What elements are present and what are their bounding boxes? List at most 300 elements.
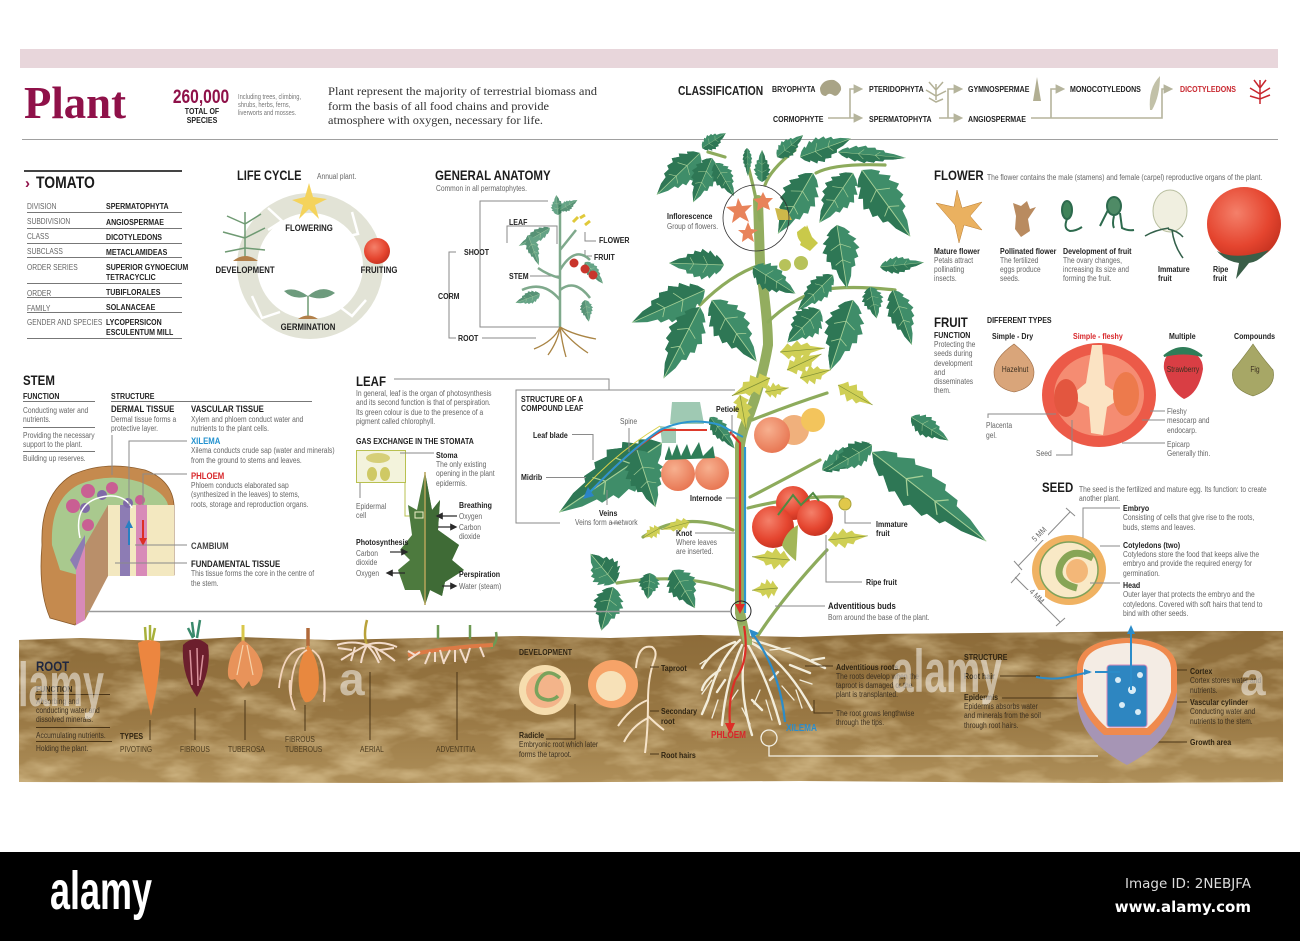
icon: seed germination stage 2 [588, 647, 664, 753]
panel: general anatomy: FRUIT [594, 252, 615, 262]
panel: compound leaf structure: Veins form a network [575, 517, 638, 527]
panel: fruit: Compounds [1234, 331, 1276, 341]
soil band [19, 631, 1283, 783]
anatomy plant [513, 195, 608, 357]
panel: life cycle: DEVELOPMENT [215, 264, 275, 275]
panel: root structure: Adventitious roots [836, 662, 899, 672]
species count: shrubs, herbs, ferns, [238, 102, 290, 109]
callout: immature fruit: Immature [876, 519, 908, 529]
panel: root development: Embryonic root which later [519, 739, 599, 749]
icon: moss [820, 80, 841, 96]
panel: root development: forms the taproot. [519, 749, 572, 759]
panel: fruit: seeds during [934, 348, 972, 358]
panel: leaf: Photosynthesis [356, 537, 409, 547]
panel: life cycle: FRUITING [361, 264, 398, 275]
plant roots [700, 625, 825, 740]
panel: stem: STEM [23, 372, 55, 388]
circle: adventitious buds [731, 601, 751, 621]
panel: seed: another plant. [1079, 493, 1120, 503]
panel: stem: CAMBIUM [191, 540, 229, 551]
callout: knot: are inserted. [676, 546, 713, 556]
illustration: tomato plant [545, 126, 1000, 640]
panel: root structure: Conducting water and [1190, 706, 1255, 716]
panel: root: dissolved minerals. [36, 714, 93, 724]
intro text: Plant represent the majority of terrestrial biomass and [328, 84, 597, 98]
panel: root structure: nutrients to the stem. [1190, 716, 1253, 726]
callout: immature fruit: fruit [876, 528, 890, 538]
panel: compound leaf structure: Leaf blade [533, 430, 568, 440]
panel: flower: Development of fruit [1063, 246, 1132, 256]
callout: knot: Knot [676, 528, 692, 538]
icon: developing fruit [1062, 197, 1134, 231]
leaves [578, 126, 1000, 634]
panel: root development [519, 647, 698, 760]
panel: root structure: Root hair [964, 671, 995, 681]
species count [173, 86, 301, 125]
panel: life cycle: LIFE CYCLE [237, 168, 301, 183]
panel: tomato taxonomy: ESCULENTUM MILL [106, 327, 174, 337]
classification: CLASSIFICATION [678, 85, 763, 98]
species count: SPECIES [187, 115, 217, 125]
panel: root development: Taproot [661, 663, 687, 673]
panel: tomato taxonomy: SPERMATOPHYTA [106, 201, 169, 211]
panel: fruit: Placenta [986, 420, 1013, 430]
panel: fruit: mesocarp and [1167, 415, 1210, 425]
panel: seed: The seed is the fertilized and mature egg. Its function: to create [1079, 484, 1267, 494]
panel: stem [23, 372, 335, 625]
icon: tomato section [1042, 343, 1156, 447]
panel: flower: FLOWER [934, 167, 984, 183]
panel: compound leaf structure: Midrib [521, 472, 542, 482]
panel: tomato taxonomy: SUBCLASS [27, 246, 63, 256]
panel: compound leaf structure [516, 390, 735, 527]
panel: tomato taxonomy: CLASS [27, 231, 49, 241]
panel: stem: (synthesized in the leaves) to stems, [191, 489, 300, 499]
panel: flower: Mature flower [934, 246, 980, 256]
panel: fruit: FUNCTION [934, 330, 971, 340]
panel: tomato taxonomy: TOMATO [36, 174, 95, 192]
icon: fig [1232, 344, 1274, 396]
panel: leaf: Its green colour is due to the presence of a [356, 407, 484, 417]
panel: root structure [761, 625, 1261, 765]
panel: fruit: Fig [1250, 364, 1260, 374]
panel: stem: PHLOEM [191, 470, 224, 481]
panel: leaf: dioxide [356, 557, 377, 567]
panel: leaf: cell [356, 510, 366, 520]
header band [20, 49, 1278, 68]
panel: root: AERIAL [360, 744, 384, 754]
icon: seed germination stage 1 [519, 665, 571, 715]
classification: PTERIDOPHYTA [869, 84, 924, 94]
classification arrows [828, 89, 1170, 118]
panel: root structure: STRUCTURE [964, 652, 1007, 662]
classification: DICOTYLEDONS [1180, 84, 1236, 94]
panel: flower: Pollinated flower [1000, 246, 1056, 256]
callout: adventitious buds: Born around the base of the plant. [828, 612, 929, 622]
panel: tomato taxonomy: FAMILY [27, 303, 50, 313]
panel: general anatomy: GENERAL ANATOMY [435, 167, 551, 183]
panel: fruit: Simple - Dry [992, 331, 1034, 341]
panel: leaf: opening in the plant [436, 468, 495, 478]
panel: leaf: Water (steam) [459, 581, 502, 591]
panel: life cycle: GERMINATION [281, 321, 335, 332]
plant roots: PHLOEM [711, 729, 746, 740]
icon: pollinated flower [1013, 201, 1036, 237]
species count: TOTAL OF [185, 106, 219, 116]
panel: root structure: nutrients. [1190, 685, 1218, 695]
panel: stem: FUNCTION [23, 391, 60, 401]
panel: flower: The ovary changes, [1063, 255, 1122, 265]
panel: flower: forming the fruit. [1063, 273, 1111, 283]
panel: root: PIVOTING [120, 744, 152, 754]
panel: seed: Consisting of cells that give rise to the roots, [1123, 512, 1254, 522]
panel: general anatomy: STEM [509, 271, 529, 281]
icon: mature flower [936, 190, 982, 243]
panel: tomato taxonomy: TETRACYCLIC [106, 272, 156, 282]
panel: fruit: Hazelnut [1002, 364, 1029, 374]
panel: tomato taxonomy: DIVISION [27, 201, 56, 211]
panel: general anatomy: FLOWER [599, 235, 630, 245]
panel: root structure: Epidermis absorbs water [964, 701, 1038, 711]
panel: leaf: Breathing [459, 500, 492, 510]
connector: stem to plant [87, 610, 731, 612]
stems [617, 150, 895, 640]
classification: MONOCOTYLEDONS [1070, 84, 1141, 94]
panel: root structure: Growth area [1190, 737, 1232, 747]
panel: stem: Xylem and phloem conduct water and [191, 414, 303, 424]
circle: inflorescence [723, 185, 789, 251]
classification [678, 76, 1270, 124]
panel: root structure: The root grows lengthwise [836, 708, 914, 718]
panel: seed [1011, 479, 1267, 626]
icon: seedling [284, 289, 335, 319]
callout: spine: Spine [620, 416, 637, 426]
panel: compound leaf structure: STRUCTURE OF A [521, 394, 583, 404]
panel: flower: increasing its size and [1063, 264, 1129, 274]
panel: root structure: through the tips. [836, 717, 884, 727]
panel: stem: support to the plant. [23, 439, 82, 449]
icon: young plant [223, 212, 265, 261]
watermarks: lamy [18, 651, 104, 720]
classification: SPERMATOPHYTA [869, 114, 932, 124]
panel: tomato taxonomy [24, 170, 189, 338]
panel: fruit: FRUIT [934, 314, 968, 330]
panel: tomato taxonomy: GENDER AND SPECIES [27, 317, 102, 327]
root hair and sap arrow [1036, 625, 1135, 690]
panel: flower: Petals attract [934, 255, 974, 265]
panel: root structure: taproot is damaged or the [836, 680, 912, 690]
panel: seed: SEED [1042, 479, 1073, 495]
bracket lines [449, 201, 596, 338]
root type leader lines [150, 672, 457, 740]
icon: strawberry [1164, 348, 1203, 399]
panel: stem: Conducting water and [23, 405, 88, 415]
panel: root structure: Cortex stores water and [1190, 675, 1261, 685]
panel: root: conducting water and [36, 705, 100, 715]
watermarks: a [339, 653, 365, 705]
callout: adventitious buds [775, 600, 929, 622]
panel: fruit: them. [934, 385, 951, 395]
panel: leaf: In general, leaf is the organ of photosynthesis [356, 388, 492, 398]
icon: hazelnut [994, 344, 1034, 392]
panel: stem: DERMAL TISSUE [111, 403, 175, 414]
panel: stem: XILEMA [191, 435, 221, 446]
species count: Including trees, climbing, [238, 94, 301, 101]
panel: flower: Ripe [1213, 264, 1229, 274]
panel: general anatomy: SHOOT [464, 247, 489, 257]
plant callouts [620, 211, 929, 622]
panel: leaf: Carbon [356, 548, 378, 558]
panel: leaf: Epidermal [356, 501, 387, 511]
callout: inflorescence: Inflorescence [667, 211, 713, 221]
panel: root: FIBROUS [285, 734, 315, 744]
panel: fruit: DIFFERENT TYPES [987, 315, 1052, 325]
callout: internode [690, 493, 737, 503]
callout: ripe fruit: Ripe fruit [866, 577, 897, 587]
panel: stem: Building up reserves. [23, 453, 86, 463]
panel: leaf: and its second function is that of perspiration. [356, 397, 491, 407]
panel: flower: Immature [1158, 264, 1190, 274]
panel: seed: germination. [1123, 568, 1160, 578]
inflorescence flowers [726, 192, 818, 271]
panel: leaf: epidermis. [436, 478, 467, 488]
tomatoes [661, 408, 851, 561]
panel: stem: nutrients to the plant cells. [191, 423, 269, 433]
panel: stem: This tissue forms the core in the centre of [191, 568, 315, 578]
panel: seed: Outer layer that protects the embryo and the [1123, 589, 1255, 599]
icon: ripe fruit [1207, 187, 1281, 279]
panel: tomato taxonomy: TUBIFLORALES [106, 287, 160, 297]
panel: tomato taxonomy: SUPERIOR GYNOECIUM [106, 262, 189, 272]
yellow leaves [639, 338, 878, 600]
panel: flower: pollinating [934, 264, 964, 274]
intro text: atmosphere with oxygen, necessary for life. [328, 113, 543, 127]
panel: stem: VASCULAR TISSUE [191, 403, 264, 414]
icon: adventitious root [408, 625, 496, 664]
footer bar [0, 852, 1300, 941]
callout: knot: Where leaves [676, 537, 717, 547]
panel: root: FIBROUS [180, 744, 210, 754]
panel: root development: Root hairs [661, 750, 696, 760]
panel: life cycle: FLOWERING [285, 222, 333, 233]
connector: root tip to section [769, 746, 1098, 756]
footer bar: alamy [50, 861, 152, 921]
panel: fruit: Multiple [1169, 331, 1196, 341]
panel: root: ADVENTITIA [436, 744, 476, 754]
stem cross-section [41, 466, 174, 625]
leaf illustration [398, 472, 464, 605]
panel: leaf: GAS EXCHANGE IN THE STOMATA [356, 436, 474, 446]
panel: seed: Head [1123, 580, 1140, 590]
panel: root structure: Epidermis [964, 692, 999, 702]
panel: stem: from the ground to stems and leaves. [191, 455, 302, 465]
callout: inflorescence: Group of flowers. [667, 221, 718, 231]
panel: general anatomy: LEAF [509, 217, 528, 227]
panel: fruit: Protecting the [934, 339, 975, 349]
panel: seed: Embryo [1123, 503, 1149, 513]
panel: seed: bind with other seeds. [1123, 608, 1188, 618]
panel: compound leaf structure: COMPOUND LEAF [521, 403, 583, 413]
classification: ANGIOSPERMAE [968, 114, 1026, 124]
title: Plant [24, 78, 126, 128]
panel: fruit: Seed [1036, 448, 1052, 458]
footer bar: www.alamy.com [1115, 898, 1251, 916]
panel: flower: seeds. [1000, 273, 1020, 283]
panel: general anatomy: ROOT [458, 333, 479, 343]
panel: stem: protective layer. [111, 423, 158, 433]
panel: root structure: through root hairs. [964, 720, 1018, 730]
panel: leaf: Oxygen [356, 568, 379, 578]
panel: root structure: and minerals from the soil [964, 710, 1041, 720]
panel: root: Holding the plant. [36, 743, 88, 753]
classification: GYMNOSPERMAE [968, 84, 1029, 94]
panel: seed: cotyledons. Covered with soft hairs that tend to [1123, 599, 1263, 609]
panel: stem: nutrients. [23, 414, 51, 424]
panel: leaf: Oxygen [459, 511, 482, 521]
species count: 260,000 [173, 86, 229, 107]
panel: leaf: LEAF [356, 373, 386, 389]
panel: leaf: Stoma [436, 450, 458, 460]
watermarks [18, 638, 1266, 720]
icon: fibrous tuberous root [279, 628, 325, 710]
panel: flower: fruit [1158, 273, 1172, 283]
panel: stem: Providing the necessary [23, 430, 95, 440]
stem callout lines [112, 435, 187, 563]
panel: root: Accumulating nutrients. [36, 730, 106, 740]
panel: root structure: Cortex [1190, 666, 1213, 676]
callout: ripe fruit [826, 535, 897, 587]
panel: tomato taxonomy: ORDER SERIES [27, 262, 78, 272]
callout: spine [620, 416, 637, 452]
panel: seed: Cotyledons store the food that keeps alive the [1123, 549, 1259, 559]
panel: leaf: Perspiration [459, 569, 500, 579]
panel: root development: Radicle [519, 730, 545, 740]
watermarks: alamy [892, 638, 1002, 705]
callout: petiole [716, 404, 740, 435]
callout: knot [676, 528, 735, 556]
panel: root structure: The roots develop when the [836, 671, 919, 681]
panel: stem: Dermal tissue forms a [111, 414, 177, 424]
panel: leaf: pigment called chlorophyll. [356, 416, 435, 426]
gas exchange arrows [388, 516, 457, 586]
panel: root structure: plant is transplanted. [836, 689, 898, 699]
panel: tomato taxonomy: METACLAMIDEAS [106, 247, 167, 257]
panel: general anatomy: CORM [438, 291, 460, 301]
panel: seed: Cotyledons (two) [1123, 540, 1181, 550]
seed dimensions [1011, 508, 1075, 626]
panel: leaf: dioxide [459, 531, 480, 541]
panel: leaf: Carbon [459, 522, 481, 532]
panel: general anatomy: Common in all permatophytes. [436, 183, 527, 193]
compound leaf [545, 402, 743, 533]
panel: tomato taxonomy: LYCOPERSICON [106, 317, 162, 327]
panel: fruit: and [934, 367, 945, 377]
callout: inflorescence [667, 211, 718, 231]
icon: flower [292, 183, 327, 219]
panel: flower: fruit [1213, 273, 1227, 283]
icon: grass blade [1150, 76, 1160, 110]
panel: stem: the stem. [191, 578, 219, 588]
icon: fern [926, 82, 946, 102]
icon: taproot [138, 625, 160, 716]
panel: fruit: Strawberry [1167, 364, 1199, 374]
panel: life cycle [215, 168, 398, 332]
seed dimensions: 4 MM [1027, 587, 1046, 606]
flow lines in stem [730, 432, 745, 614]
panel: fruit: Simple - fleshy [1073, 331, 1123, 341]
panel: leaf [356, 373, 609, 605]
panel: root: FUNCTION [36, 684, 73, 694]
circle: root tip [761, 730, 777, 746]
panel: fruit: endocarp. [1167, 425, 1197, 435]
panel: root: TYPES [120, 731, 143, 741]
intro text: form the basis of all food chains and provide [328, 99, 549, 113]
classification: BRYOPHYTA [772, 84, 816, 94]
panel: stem: roots, storage and reproduction organs. [191, 499, 309, 509]
panel: fruit: Fleshy [1167, 406, 1187, 416]
panel: flower: insects. [934, 273, 957, 283]
icon: fibrous root [183, 620, 209, 697]
panel: stem: Phloem conducts elaborated sap [191, 480, 289, 490]
panel: root development: root [661, 716, 675, 726]
callout: immature fruit [845, 511, 908, 538]
panel: fruit: development [934, 358, 973, 368]
footer bar: Image ID: 2NEBJFA [1125, 876, 1252, 892]
panel: root: TUBEROUS [285, 744, 322, 754]
panel: tomato taxonomy: SOLANACEAE [106, 302, 155, 312]
panel: root development: Secondary [661, 706, 698, 716]
panel: root: ROOT [36, 658, 69, 674]
species count: liverworts and mosses. [238, 110, 296, 117]
panel: flower: The fertilized [1000, 255, 1038, 265]
cycle ring [247, 203, 373, 329]
icon: dicot plant [1250, 80, 1270, 104]
root section [1077, 638, 1177, 765]
panel: seed: buds, stems and leaves. [1123, 522, 1195, 532]
panel: life cycle: Annual plant. [317, 171, 356, 181]
icon: immature fruit [1145, 190, 1187, 258]
fruit section callouts [988, 411, 1165, 455]
panel: leaf: The only existing [436, 459, 486, 469]
panel: stem: STRUCTURE [111, 391, 154, 401]
panel: tomato taxonomy: › [25, 175, 30, 192]
panel: root development: DEVELOPMENT [519, 647, 572, 657]
icon: seed section [1032, 535, 1106, 605]
panel: flower: The flower contains the male (stamens) and female (carpel) reproductive organs of the plant. [987, 172, 1262, 182]
icon: tuberous root [228, 625, 263, 689]
panel: flower [934, 167, 1281, 283]
callout: petiole: Petiole [716, 404, 740, 414]
seed dimensions: 5 MM [1030, 525, 1049, 544]
icon: aerial root [337, 620, 397, 663]
panel: fruit: gel. [986, 430, 997, 440]
panel: fruit: Epicarp [1167, 439, 1190, 449]
watermarks: a [1240, 653, 1266, 705]
callout: internode: Internode [690, 493, 723, 503]
panel: fruit: disseminates [934, 376, 973, 386]
panel: root [36, 620, 496, 754]
panel: fruit [934, 314, 1276, 458]
stomata inset [356, 450, 417, 516]
panel: stem: FUNDAMENTAL TISSUE [191, 558, 280, 569]
panel: general anatomy [435, 167, 630, 357]
panel: flower: eggs produce [1000, 264, 1041, 274]
icon: fruit [364, 238, 390, 264]
panel: root: TUBEROSA [228, 744, 265, 754]
panel: tomato taxonomy: DICOTYLEDONS [106, 232, 162, 242]
header rule [22, 139, 1278, 140]
panel: fruit: Generally thin. [1167, 448, 1210, 458]
